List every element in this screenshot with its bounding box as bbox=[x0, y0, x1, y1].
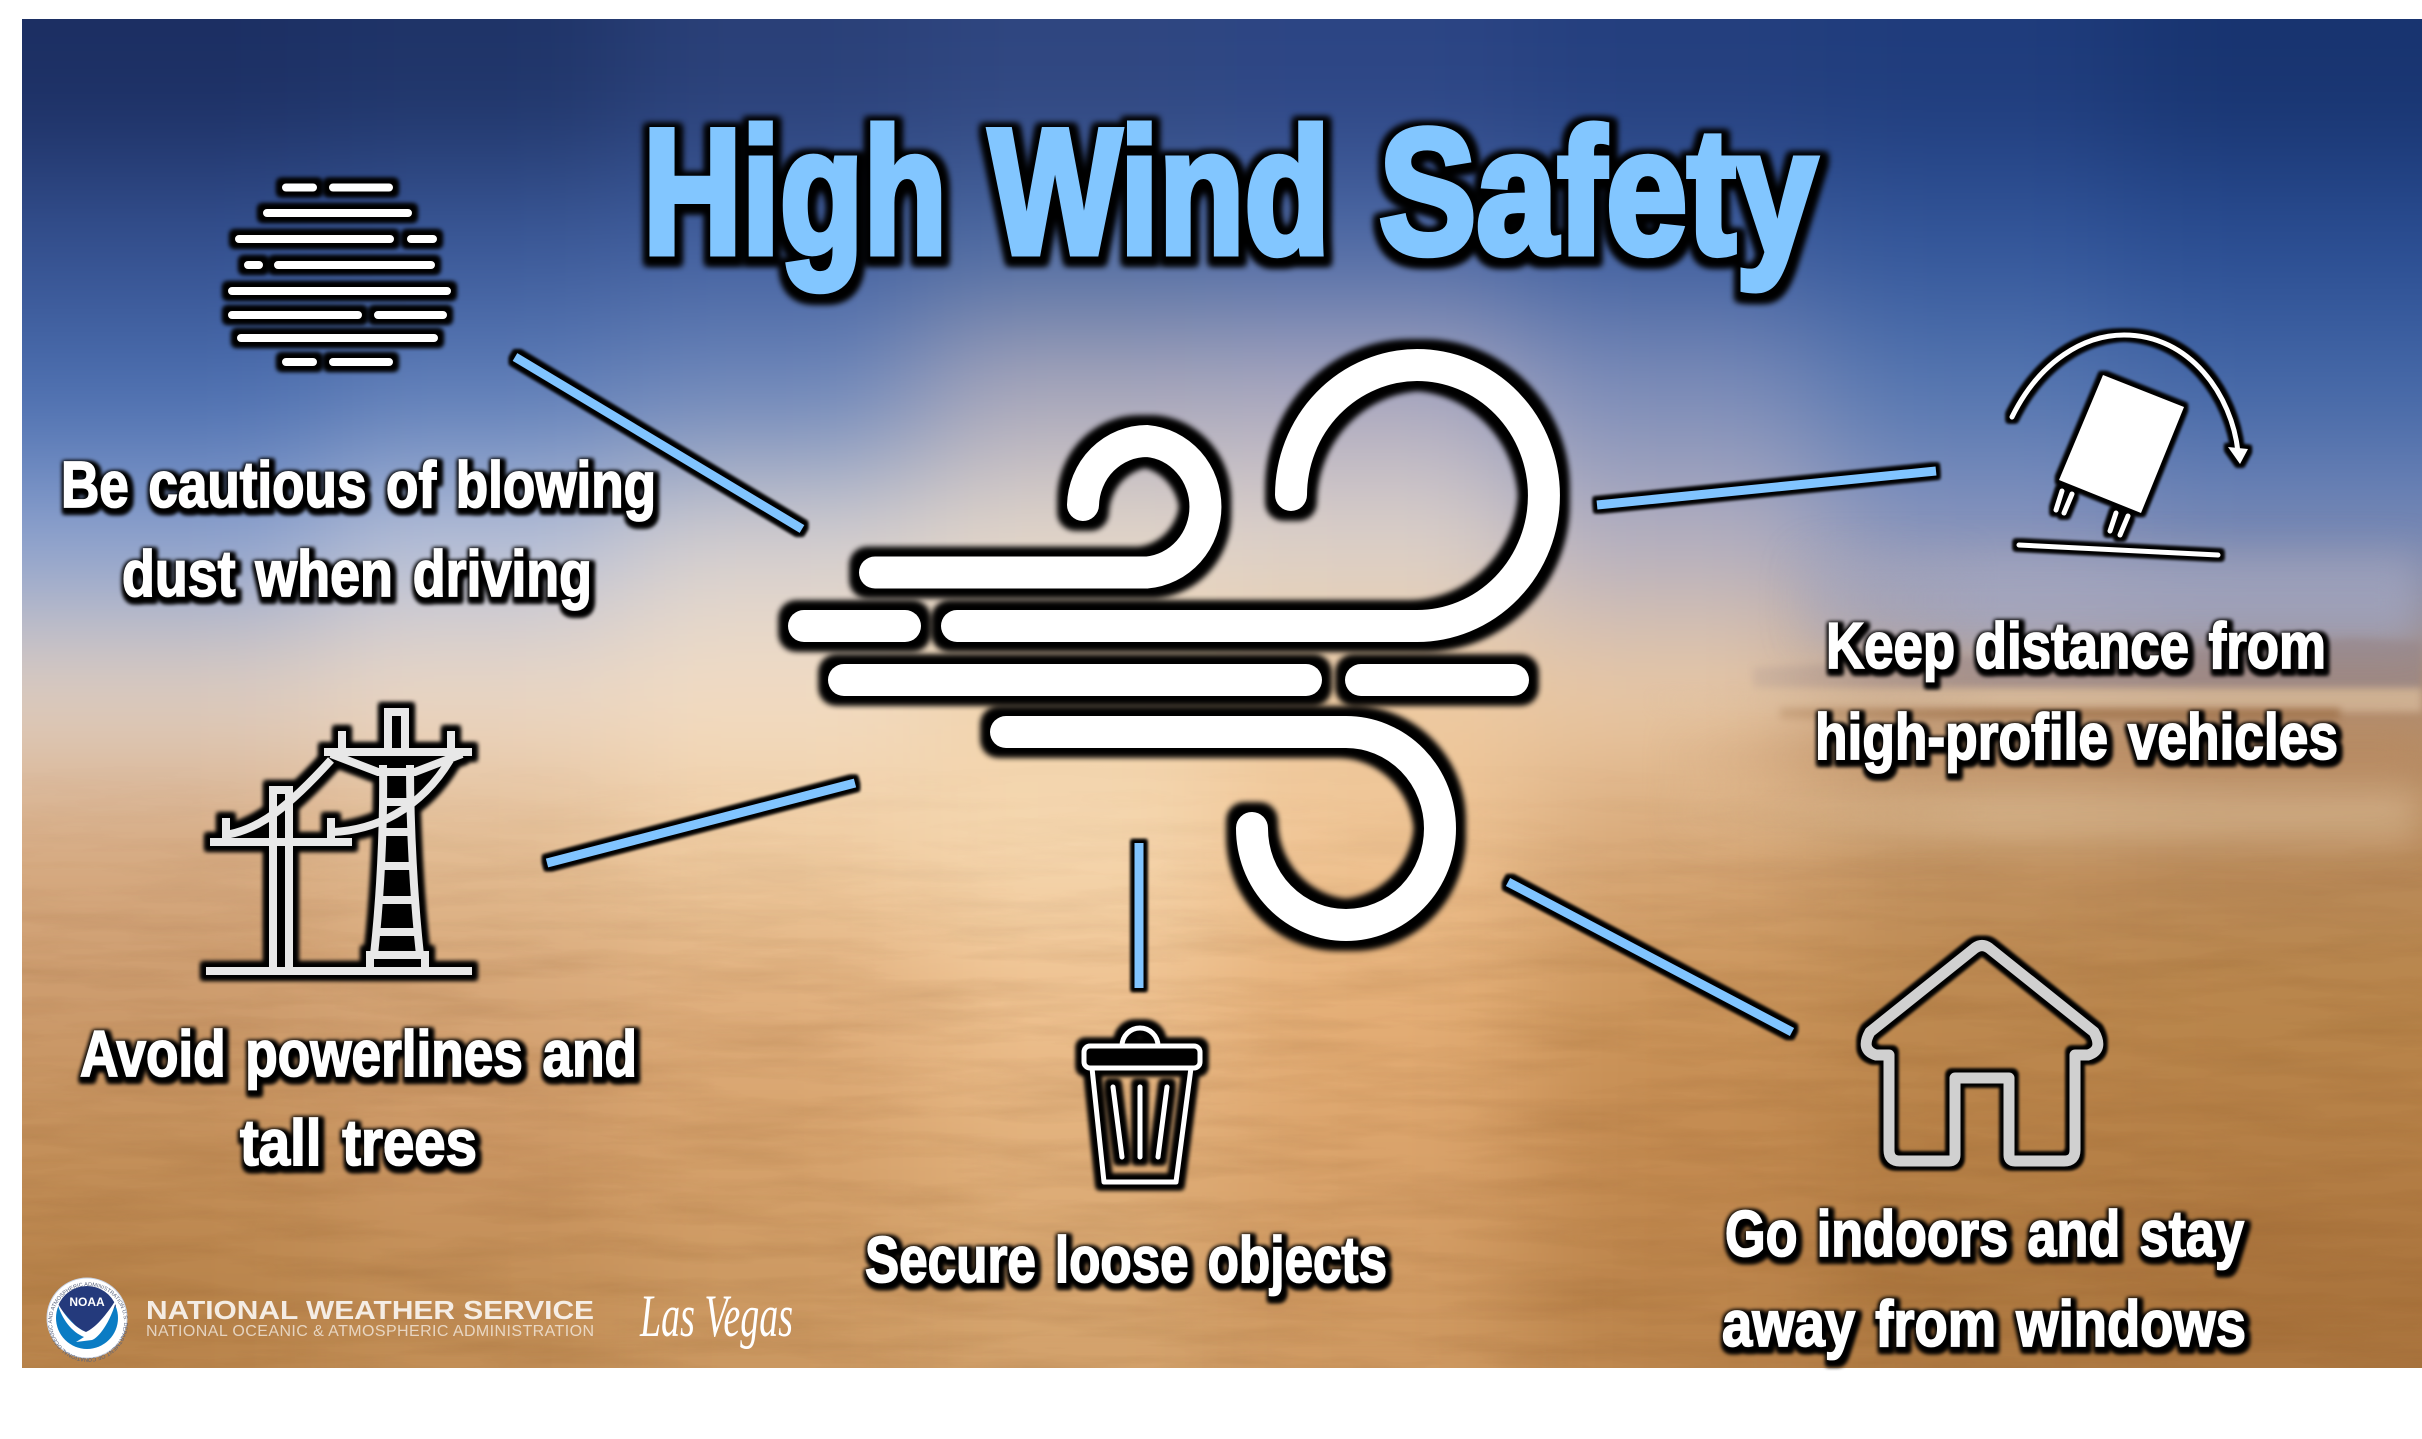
text: powerlines tip: tall trees bbox=[240, 1106, 477, 1179]
arrow: connector to loose objects tip bbox=[1134, 843, 1144, 988]
text: vehicles tip bbox=[1815, 609, 2338, 773]
icon: house bbox=[1866, 946, 2098, 1161]
text: blowing dust tip: Be cautious of blowing bbox=[61, 448, 656, 521]
arrow: connector to dust tip bbox=[515, 357, 802, 529]
title: Wind bbox=[989, 92, 1330, 291]
text: loose objects tip: Secure loose objects bbox=[865, 1223, 1387, 1296]
icon: blowing dust bbox=[232, 188, 447, 362]
icon: NOAA logo: NATIONAL OCEANIC AND ATMOSPHERIC ADMINISTRATION U.S. DEPARTMENT OF COMMERCE bbox=[48, 1282, 128, 1362]
title: High bbox=[643, 92, 947, 291]
arrow: connector to indoors tip bbox=[1508, 882, 1792, 1032]
text: National Weather Service wordmark: NATIONAL WEATHER SERVICE bbox=[146, 1295, 594, 1325]
title: Safety bbox=[1379, 92, 1817, 291]
title bbox=[643, 92, 1817, 291]
text: blowing dust tip bbox=[61, 448, 656, 610]
text: powerlines tip: Avoid powerlines and bbox=[80, 1017, 637, 1090]
icon: NOAA logo bbox=[46, 1278, 128, 1362]
text: National Weather Service wordmark bbox=[146, 1295, 594, 1340]
arrow: connector to vehicles tip bbox=[1597, 471, 1936, 505]
text: National Weather Service wordmark: NATIONAL OCEANIC & ATMOSPHERIC ADMINISTRATION bbox=[146, 1323, 594, 1340]
icon: NOAA logo: NOAA bbox=[69, 1295, 105, 1309]
icon: powerline tower and pole bbox=[206, 712, 472, 971]
arrow: connector to powerlines tip bbox=[547, 783, 855, 863]
text: Las Vegas office: Las Vegas bbox=[639, 1283, 793, 1349]
icon: overturning high-profile vehicle bbox=[2012, 335, 2248, 555]
text: indoors tip: away from windows bbox=[1722, 1287, 2246, 1360]
text: powerlines tip bbox=[80, 1017, 637, 1179]
text: blowing dust tip: dust when driving bbox=[122, 537, 592, 610]
icon: central wind symbol bbox=[804, 365, 1544, 925]
text: indoors tip bbox=[1722, 1197, 2246, 1360]
icon: trash can bbox=[1084, 1028, 1200, 1182]
text: indoors tip: Go indoors and stay bbox=[1725, 1197, 2244, 1270]
